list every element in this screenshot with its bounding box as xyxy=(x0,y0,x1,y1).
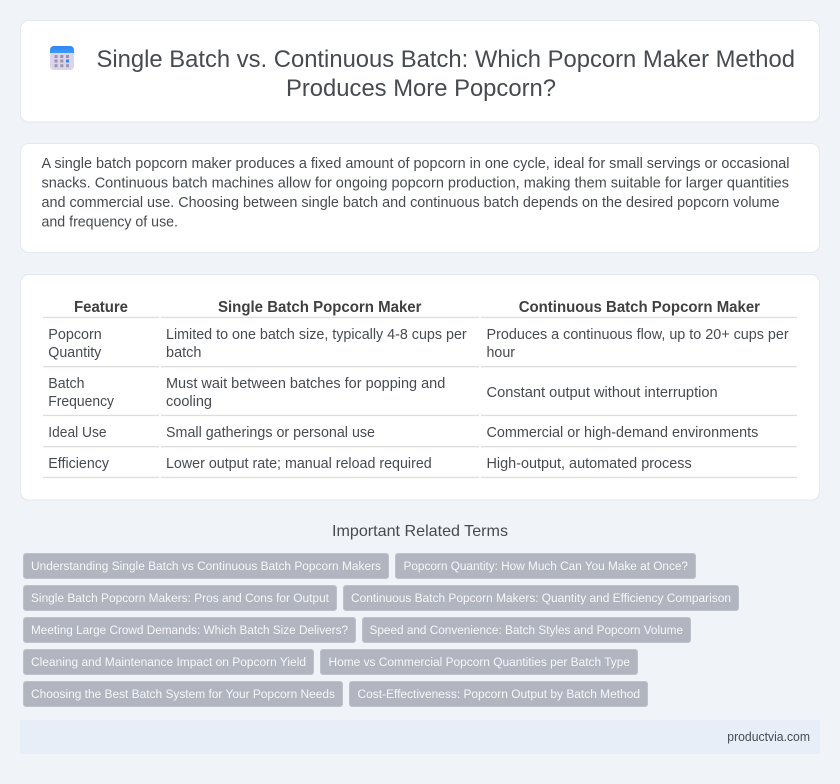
tag list: related terms xyxy=(24,554,738,706)
table row: batch frequency: Must wait between batches for popping and xyxy=(166,376,445,392)
footer bar xyxy=(20,720,820,754)
text block: description xyxy=(42,156,790,230)
text block: description: A single batch popcorn maker produces a fixed amount of popcorn in one cycle, ideal for small servings or occasional xyxy=(42,156,790,172)
table row: popcorn quantity xyxy=(48,327,789,361)
tag list: related terms: Single Batch Popcorn Makers: Pros and Cons for Output xyxy=(31,591,330,605)
text block: description: snacks. Continuous batch machines allow for ongoing popcorn production, making them suitable for larger quantities xyxy=(42,176,789,192)
table row: popcorn quantity: Popcorn xyxy=(48,327,102,343)
heading: important related terms: Important Related Terms xyxy=(332,523,508,540)
table row: popcorn quantity: batch xyxy=(166,345,202,361)
title: Produces More Popcorn? xyxy=(286,75,556,102)
footer: site name: productvia.com xyxy=(727,730,810,744)
title xyxy=(96,46,795,102)
tag list: related terms: Choosing the Best Batch System for Your Popcorn Needs xyxy=(31,687,335,701)
table row: ideal use xyxy=(48,425,758,441)
table row: batch frequency: Frequency xyxy=(48,394,115,410)
table header row: Continuous Batch Popcorn Maker xyxy=(519,299,760,316)
tag list: related terms: Meeting Large Crowd Demands: Which Batch Size Delivers? xyxy=(31,623,348,637)
table row: batch frequency: cooling xyxy=(166,394,212,410)
tag list: related terms: Popcorn Quantity: How Much Can You Make at Once? xyxy=(404,559,688,573)
table row: ideal use: Commercial or high-demand environments xyxy=(486,425,758,441)
panel: title header xyxy=(20,20,820,122)
text block: description: and commercial use. Choosing between single batch and continuous batch depends on the desired popcorn volume xyxy=(42,195,780,211)
tag list: related terms: Understanding Single Batch vs Continuous Batch Popcorn Makers xyxy=(31,559,381,573)
table header row: Single Batch Popcorn Maker xyxy=(218,299,422,316)
table row: ideal use: Small gatherings or personal use xyxy=(166,425,375,441)
table row: popcorn quantity: hour xyxy=(486,345,515,361)
table header row: Feature xyxy=(74,299,128,316)
tag list: related terms: Home vs Commercial Popcorn Quantities per Batch Type xyxy=(328,655,630,669)
table row: batch frequency: Constant output without interruption xyxy=(486,385,718,401)
table row: ideal use: Ideal Use xyxy=(48,425,106,441)
tag list: related terms: Continuous Batch Popcorn Makers: Quantity and Efficiency Comparison xyxy=(351,591,731,605)
tag list: related terms: Cost-Effectiveness: Popcorn Output by Batch Method xyxy=(358,687,640,701)
title: Single Batch vs. Continuous Batch: Which Popcorn Maker Method xyxy=(96,46,795,73)
icon: calendar xyxy=(50,46,74,70)
panel: comparison table xyxy=(20,274,820,500)
table row: efficiency: High-output, automated process xyxy=(486,456,692,472)
table row: efficiency: Efficiency xyxy=(48,456,110,472)
table row: batch frequency xyxy=(48,376,718,410)
table row: popcorn quantity: Quantity xyxy=(48,345,102,361)
table row: efficiency xyxy=(48,456,692,472)
table row: efficiency: Lower output rate; manual reload required xyxy=(166,456,432,472)
tag list: related terms: Speed and Convenience: Batch Styles and Popcorn Volume xyxy=(370,623,683,637)
table row: popcorn quantity: Limited to one batch size, typically 4-8 cups per xyxy=(166,327,467,343)
table header row xyxy=(74,299,760,316)
table row: popcorn quantity: Produces a continuous flow, up to 20+ cups per xyxy=(486,327,789,343)
table row: batch frequency: Batch xyxy=(48,376,84,392)
tag list: related terms: Cleaning and Maintenance Impact on Popcorn Yield xyxy=(31,655,306,669)
text block: description: and frequency of use. xyxy=(42,214,178,230)
panel: intro paragraph xyxy=(20,144,820,252)
